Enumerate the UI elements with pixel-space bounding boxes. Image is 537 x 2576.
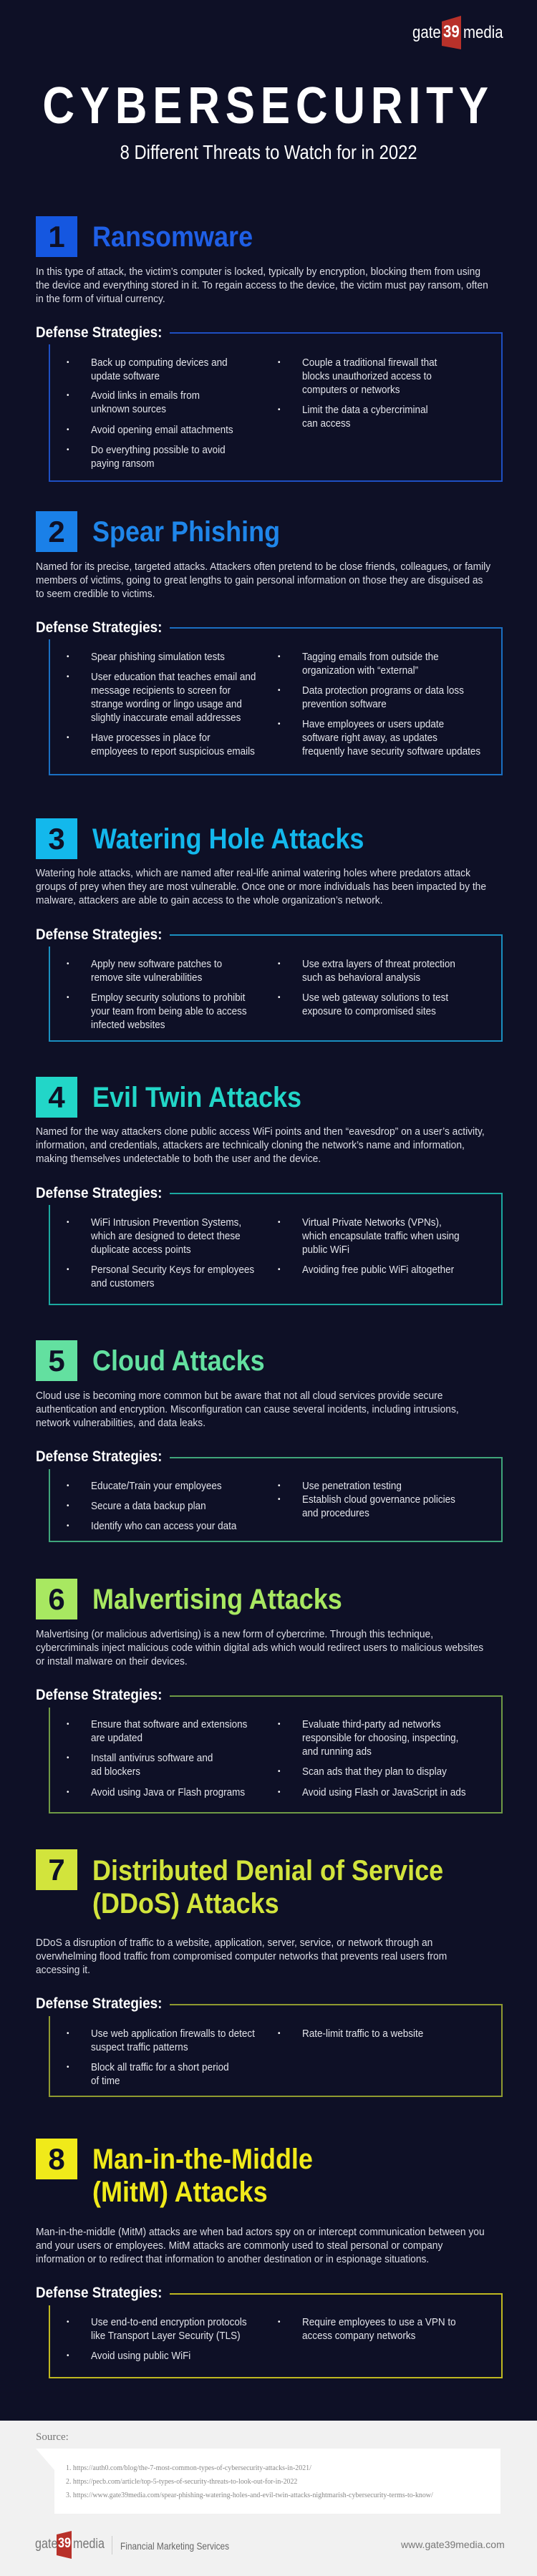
defense frame <box>49 1193 503 1305</box>
strategies list: • <box>67 1219 69 1226</box>
strategies list: message recipients to screen for <box>91 684 231 697</box>
strategies list: • <box>67 446 69 454</box>
number badge 6: 6 <box>48 1582 65 1616</box>
strategies list: your team from being able to access <box>91 1005 247 1017</box>
strategies list: Personal Security Keys for employees <box>91 1264 254 1276</box>
description <box>36 1125 485 1165</box>
strategies list: • <box>278 1219 281 1226</box>
number badge 2: 2 <box>48 515 65 548</box>
description: Malvertising (or malicious advertising) is a new form of cybercrime. Through this technique, <box>36 1628 433 1640</box>
strategies list: • <box>67 1754 69 1762</box>
defense frame <box>49 627 503 775</box>
strategies list: which are designed to detect these <box>91 1230 241 1242</box>
strategies list: • <box>278 1768 281 1776</box>
strategies list: • <box>278 2318 281 2326</box>
strategies list: • <box>67 653 69 661</box>
strategies list <box>67 2316 456 2362</box>
strategies list <box>67 1718 466 1798</box>
strategies list: Ensure that software and extensions <box>91 1718 247 1730</box>
strategies list: • <box>67 2318 69 2326</box>
description: Named for the way attackers clone public access WiFi points and then “eavesdrop” on a user’s activity, <box>36 1125 485 1138</box>
strategies list: Rate-limit traffic to a website <box>302 2028 423 2040</box>
strategies list: • <box>67 1788 69 1796</box>
section 2: Spear Phishing <box>36 511 503 775</box>
strategies list: • <box>67 359 69 367</box>
heading <box>92 1855 443 1919</box>
number badge 4: 4 <box>48 1080 65 1114</box>
strategies list: duplicate access points <box>91 1244 191 1256</box>
strategies list: unknown sources <box>91 403 166 415</box>
number badge 7: 7 <box>48 1853 65 1887</box>
strategies list: • <box>67 2352 69 2360</box>
description: in the form of virtual currency. <box>36 293 165 305</box>
strategies list: access company networks <box>302 2330 415 2342</box>
strategies list: and customers <box>91 1277 155 1289</box>
title: CYBERSECURITY <box>43 77 494 135</box>
website url: www.gate39media.com <box>401 2539 505 2550</box>
strategies list: public WiFi <box>302 1244 349 1256</box>
strategies list: • <box>278 1788 281 1796</box>
footer logo: media <box>73 2537 105 2552</box>
strategies list: are updated <box>91 1732 142 1744</box>
strategies list: • <box>278 1266 281 1274</box>
description: Cloud use is becoming more common but be aware that not all cloud services provide secure <box>36 1390 442 1402</box>
heading: Evil Twin Attacks <box>92 1082 301 1113</box>
defense heading: Defense Strategies: <box>36 324 162 341</box>
heading: Ransomware <box>92 221 253 253</box>
number badge 8 <box>36 2139 77 2179</box>
strategies list: Avoid using public WiFi <box>91 2350 190 2362</box>
strategies list: Virtual Private Networks (VPNs), <box>302 1216 442 1229</box>
strategies list: • <box>67 673 69 681</box>
strategies list: Employ security solutions to prohibit <box>91 992 245 1004</box>
strategies list: • <box>278 406 281 414</box>
sources box: 1. https://auth0.com/blog/the-7-most-common-types-of-cybersecurity-attacks-in-2021/ <box>66 2464 311 2472</box>
logo: gate39media header: media <box>463 23 503 42</box>
tagline: Financial Marketing Services <box>120 2540 229 2552</box>
heading: Cloud Attacks <box>92 1345 265 1377</box>
number badge 6 <box>36 1579 77 1619</box>
description: authentication and encryption. Misconfiguration can cause several incidents, including intrusions, <box>36 1403 459 1415</box>
heading <box>92 2144 313 2208</box>
defense heading: Defense Strategies: <box>36 619 162 636</box>
strategies list <box>67 1216 460 1289</box>
strategies list: • <box>67 1522 69 1530</box>
strategies list: Spear phishing simulation tests <box>91 651 225 663</box>
number badge 8: 8 <box>48 2142 65 2176</box>
strategies list: Establish cloud governance policies <box>302 1493 455 1506</box>
strategies list: • <box>278 2030 281 2038</box>
strategies list: update software <box>91 370 160 382</box>
logo: gate39media header: gate <box>412 23 441 42</box>
strategies list: Avoid opening email attachments <box>91 424 233 436</box>
section 4: Evil Twin Attacks <box>36 1077 503 1305</box>
strategies list: Do everything possible to avoid <box>91 444 226 456</box>
description: Named for its precise, targeted attacks. Attackers often pretend to be close friends, colleagues, or family <box>36 561 490 573</box>
strategies list: which encapsulate traffic when using <box>302 1230 460 1242</box>
strategies list: and procedures <box>302 1507 369 1519</box>
strategies list: Use web gateway solutions to test <box>302 992 448 1004</box>
strategies list: Secure a data backup plan <box>91 1500 206 1512</box>
section 1: Ransomware <box>36 216 503 482</box>
strategies list: remove site vulnerabilities <box>91 972 202 984</box>
sources box: 3. https://www.gate39media.com/spear-phishing-watering-holes-and-evil-twin-attacks-nightmarish-cybersecurity-terms-to-know/ <box>66 2491 433 2499</box>
strategies list: frequently have security software updates <box>302 745 480 757</box>
description: overwhelming flood traffic from compromised computer networks that prevents real users from <box>36 1950 447 1962</box>
strategies list: Back up computing devices and <box>91 357 228 369</box>
strategies list: Block all traffic for a short period <box>91 2061 229 2073</box>
description: DDoS a disruption of traffic to a website, application, server, service, or network through an <box>36 1937 432 1949</box>
strategies list: • <box>67 2063 69 2071</box>
section 8: MitM Attacks <box>36 2139 503 2378</box>
description: and your users or employees. MitM attacks are commonly used to steal personal or company <box>36 2240 442 2252</box>
sources box: 2. https://pecb.com/article/top-5-types-of-security-threats-to-look-out-for-in-2022 <box>66 2477 297 2486</box>
description: the device and everything stored in it. To regain access to the device, the victim must pay ransom, often <box>36 279 488 291</box>
strategies list: • <box>67 426 69 434</box>
strategies list: employees to report suspicious emails <box>91 745 255 757</box>
strategies list: Use end-to-end encryption protocols <box>91 2316 247 2328</box>
strategies list: Avoid links in emails from <box>91 389 200 402</box>
heading: Spear Phishing <box>92 516 280 548</box>
section 7: DDoS Attacks <box>36 1849 503 2097</box>
strategies list: Identify who can access your data <box>91 1520 236 1532</box>
strategies list: exposure to compromised sites <box>302 1005 436 1017</box>
defense frame <box>49 2293 503 2378</box>
description <box>36 867 486 906</box>
description: In this type of attack, the victim’s computer is locked, typically by encryption, blocking them from using <box>36 266 480 278</box>
description: members of victims, going to great lengths to gain personal information on those they are disguised as <box>36 574 483 586</box>
defense heading: Defense Strategies: <box>36 1185 162 1201</box>
strategies list: strange wording or lingo usage and <box>91 698 242 710</box>
description: groups of prey when they are most vulnerable. Once one or more individuals has been impacted by the <box>36 881 486 893</box>
heading: Malvertising Attacks <box>92 1584 342 1615</box>
strategies list: Tagging emails from outside the <box>302 651 439 663</box>
strategies list: Scan ads that they plan to display <box>302 1766 447 1778</box>
strategies list: blocks unauthorized access to <box>302 370 432 382</box>
defense heading: Defense Strategies: <box>36 1995 162 2012</box>
heading: Distributed Denial of Service <box>92 1855 443 1887</box>
strategies list: • <box>67 994 69 1002</box>
strategies list: Use web application firewalls to detect <box>91 2028 255 2040</box>
strategies list: • <box>67 392 69 400</box>
description: Watering hole attacks, which are named after real-life animal watering holes where predators attack <box>36 867 470 879</box>
strategies list: Require employees to use a VPN to <box>302 2316 456 2328</box>
subtitle: 8 Different Threats to Watch for in 2022 <box>120 141 417 163</box>
strategies list: • <box>278 1496 281 1504</box>
description <box>36 1390 459 1429</box>
defense frame <box>49 1457 503 1542</box>
description: network vulnerabilities, and data leaks. <box>36 1417 205 1429</box>
strategies list: computers or networks <box>302 384 400 396</box>
number badge 1 <box>36 216 77 257</box>
strategies list <box>67 357 437 470</box>
strategies list: such as behavioral analysis <box>302 972 420 984</box>
number badge 4 <box>36 1077 77 1118</box>
number badge 3 <box>36 818 77 859</box>
heading: Watering Hole Attacks <box>92 823 364 855</box>
description: information or to redirect that information to another destination or in espionage situations. <box>36 2253 429 2265</box>
strategies list: suspect traffic patterns <box>91 2041 188 2053</box>
strategies list: software right away, as updates <box>302 732 437 744</box>
strategies list: Avoid using Java or Flash programs <box>91 1786 245 1798</box>
strategies list: Limit the data a cybercriminal <box>302 404 428 416</box>
footer logo: 39 <box>58 2536 71 2551</box>
strategies list: organization with “external” <box>302 664 418 677</box>
strategies list <box>67 1480 455 1532</box>
number badge 5 <box>36 1340 77 1381</box>
logo: gate39media header: 39 <box>443 22 460 42</box>
strategies list: like Transport Layer Security (TLS) <box>91 2330 241 2342</box>
strategies list: • <box>278 359 281 367</box>
number badge 5: 5 <box>48 1344 65 1377</box>
strategies list: prevention software <box>302 698 387 710</box>
strategies list: Have processes in place for <box>91 732 211 744</box>
strategies list <box>67 2028 423 2087</box>
logo: gate39media header <box>412 16 503 49</box>
strategies list: and running ads <box>302 1745 372 1758</box>
strategies list: infected websites <box>91 1019 165 1031</box>
number badge 1: 1 <box>48 220 65 253</box>
defense frame <box>49 2004 503 2097</box>
strategies list: Evaluate third-party ad networks <box>302 1718 441 1730</box>
strategies list: • <box>67 960 69 968</box>
footer panel <box>0 2421 537 2576</box>
strategies list: Avoiding free public WiFi altogether <box>302 1264 454 1276</box>
strategies list: • <box>67 734 69 742</box>
defense frame <box>49 934 503 1042</box>
sources label: Source: <box>36 2431 69 2443</box>
description: Man-in-the-middle (MitM) attacks are when bad actors spy on or intercept communication between you <box>36 2226 485 2238</box>
strategies list: slightly inaccurate email addresses <box>91 712 241 724</box>
strategies list: Use extra layers of threat protection <box>302 958 455 970</box>
number badge 7 <box>36 1849 77 1890</box>
heading: (DDoS) Attacks <box>92 1888 279 1919</box>
description: to seem credible to victims. <box>36 588 155 600</box>
strategies list: Install antivirus software and <box>91 1752 213 1764</box>
description <box>36 1628 483 1667</box>
description: cybercriminals inject malicious code within digital ads which would redirect users to malicious websites <box>36 1642 483 1654</box>
defense heading: Defense Strategies: <box>36 1448 162 1465</box>
footer logo: gate <box>35 2537 57 2552</box>
strategies list: Avoid using Flash or JavaScript in ads <box>302 1786 466 1798</box>
defense frame <box>49 1695 503 1814</box>
description: information, and credentials, attackers are technically cloning the network’s name and information, <box>36 1139 465 1151</box>
strategies list <box>67 958 455 1031</box>
strategies list: • <box>67 2030 69 2038</box>
description <box>36 1937 447 1976</box>
strategies list: User education that teaches email and <box>91 671 256 683</box>
section 3: Watering Hole Attacks <box>36 818 503 1042</box>
strategies list: Apply new software patches to <box>91 958 222 970</box>
description: or install malware on their devices. <box>36 1655 188 1667</box>
strategies list: Use penetration testing <box>302 1480 402 1492</box>
number badge 3: 3 <box>48 822 65 856</box>
description: making themselves undetectable to both the user and the device. <box>36 1153 321 1165</box>
strategies list: • <box>67 1266 69 1274</box>
strategies list: can access <box>302 417 351 430</box>
sources box <box>36 2449 500 2514</box>
strategies list: • <box>278 653 281 661</box>
description <box>36 266 488 305</box>
strategies list: • <box>67 1502 69 1510</box>
section 7: DDoS Attacks: of time <box>91 2075 120 2087</box>
description: accessing it. <box>36 1964 90 1976</box>
strategies list: • <box>67 1720 69 1728</box>
defense heading: Defense Strategies: <box>36 1687 162 1703</box>
strategies list: Couple a traditional firewall that <box>302 357 437 369</box>
footer logo <box>35 2531 105 2559</box>
strategies list: • <box>278 1482 281 1490</box>
description <box>36 561 491 600</box>
strategies list: • <box>278 1720 281 1728</box>
strategies list: paying ransom <box>91 457 155 470</box>
defense heading: Defense Strategies: <box>36 2285 162 2301</box>
strategies list: • <box>278 720 281 728</box>
strategies list: Educate/Train your employees <box>91 1480 222 1492</box>
number badge 2 <box>36 511 77 552</box>
strategies list: • <box>67 1482 69 1490</box>
strategies list: • <box>278 994 281 1002</box>
section 6: Malvertising Attacks <box>36 1579 503 1814</box>
strategies list: • <box>278 687 281 694</box>
strategies list: responsible for choosing, inspecting, <box>302 1732 458 1744</box>
strategies list: ad blockers <box>91 1766 140 1778</box>
heading: (MitM) Attacks <box>92 2176 268 2208</box>
strategies list: WiFi Intrusion Prevention Systems, <box>91 1216 241 1229</box>
strategies list: • <box>278 960 281 968</box>
description: malware, attackers are able to gain access to the whole organization’s network. <box>36 894 383 906</box>
section 5: Cloud Attacks <box>36 1340 503 1542</box>
strategies list <box>67 651 480 757</box>
strategies list: Have employees or users update <box>302 718 444 730</box>
defense heading: Defense Strategies: <box>36 926 162 943</box>
strategies list: Data protection programs or data loss <box>302 684 464 697</box>
description <box>36 2226 485 2265</box>
defense frame <box>49 332 503 482</box>
heading: Man-in-the-Middle <box>92 2144 313 2175</box>
